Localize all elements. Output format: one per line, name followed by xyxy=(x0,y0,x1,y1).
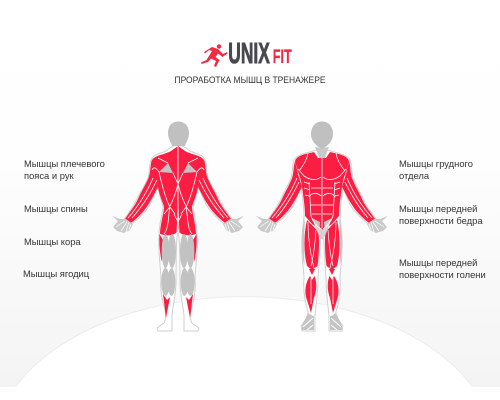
labels: front muscles: поверхности голени xyxy=(399,269,486,280)
brand name UNIX: UNIX xyxy=(228,38,270,70)
icon: red runner xyxy=(201,44,228,67)
labels: front muscles: Мышцы грудного xyxy=(399,158,473,169)
labels: front muscles: Мышцы передней xyxy=(399,203,477,214)
title: ПРОРАБОТКА МЫШЦ В ТРЕНАЖЕРЕ xyxy=(174,75,326,85)
head: back xyxy=(168,122,189,146)
labels: front muscles: Мышцы передней xyxy=(399,257,477,268)
labels: front muscles: отдела xyxy=(399,170,430,181)
head: front xyxy=(311,122,333,149)
labels: front muscles: поверхности бедра xyxy=(399,215,483,226)
brand name FIT: FIT xyxy=(273,46,292,68)
labels: back muscles: пояса и рук xyxy=(24,170,75,181)
figure: back view xyxy=(112,122,244,331)
figure: front view xyxy=(256,122,388,331)
labels: back muscles: Мышцы спины xyxy=(24,203,88,214)
labels: back muscles: Мышцы ягодиц xyxy=(23,268,90,279)
logo xyxy=(201,38,292,70)
labels: back muscles xyxy=(23,158,105,279)
labels: back muscles: Мышцы плечевого xyxy=(24,158,105,169)
labels: back muscles: Мышцы кора xyxy=(24,236,81,247)
labels: front muscles xyxy=(399,158,486,280)
